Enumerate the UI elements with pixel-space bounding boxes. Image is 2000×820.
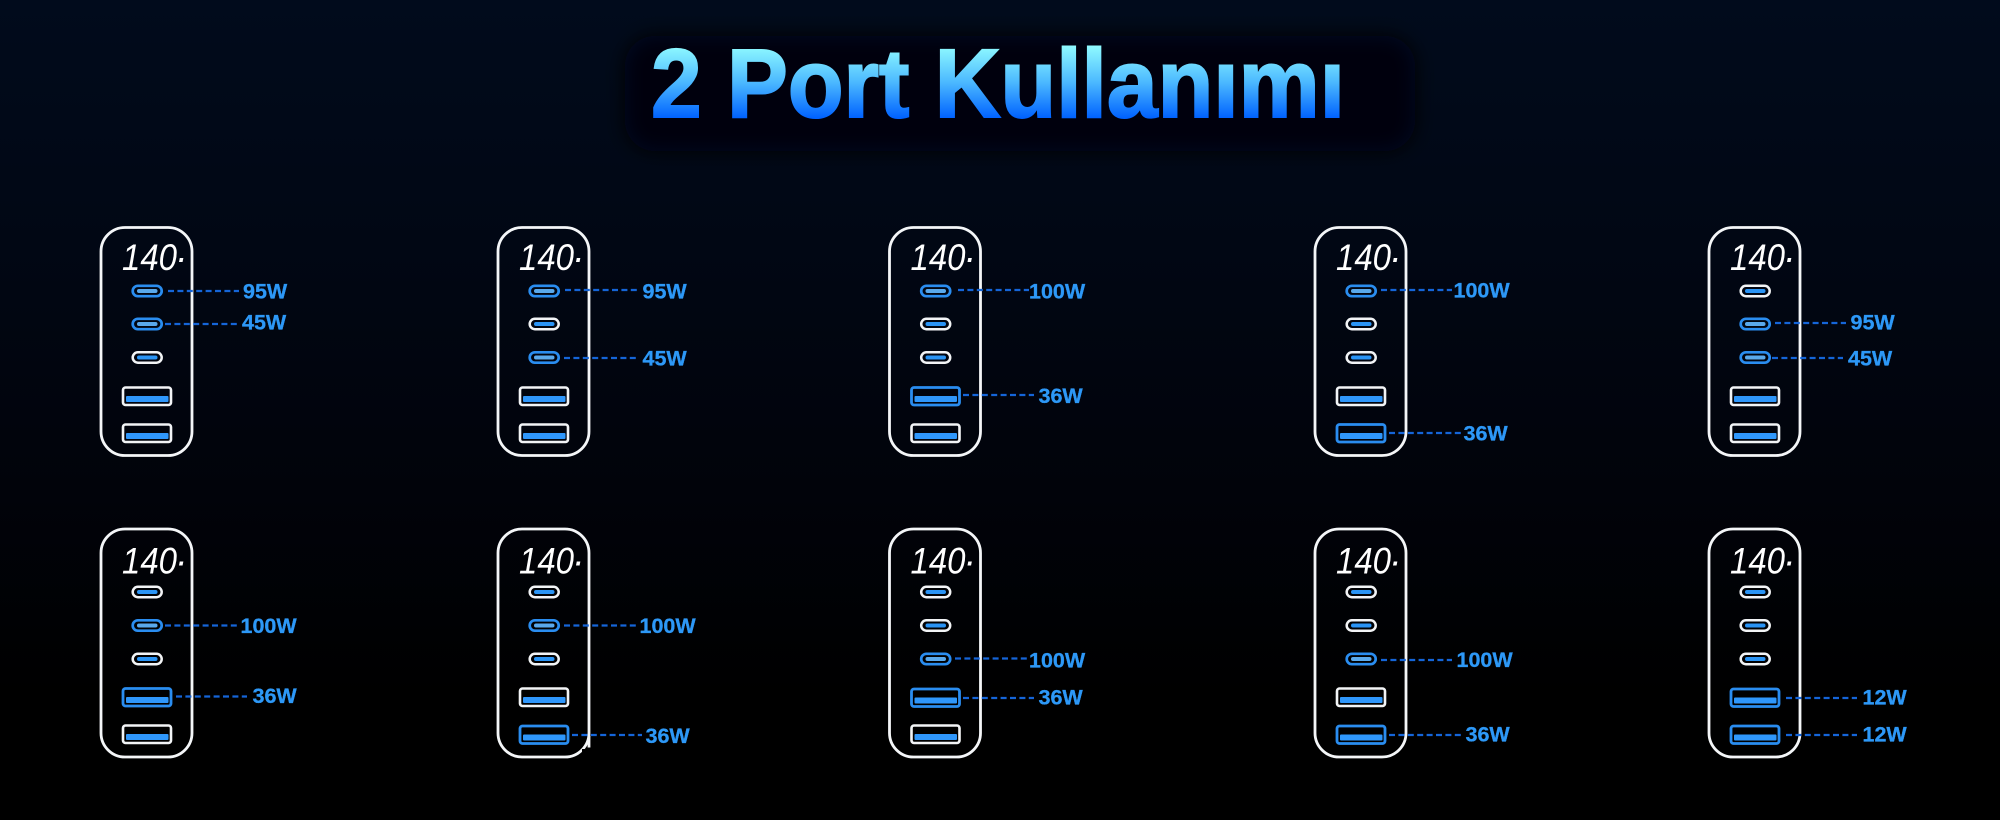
callout: 36W: 36W — [1466, 722, 1510, 746]
port: USB-A 1 — [520, 388, 568, 405]
callout: 36W — [1389, 422, 1508, 446]
port: USB-C 1 — [530, 587, 559, 597]
callout: 100W: 100W — [1454, 278, 1510, 302]
display: · — [964, 237, 976, 278]
callout: 95W: 95W — [1850, 310, 1895, 334]
port: USB-C 3 active — [1741, 352, 1770, 363]
callout: 100W — [165, 614, 297, 638]
callout: 36W — [572, 724, 690, 748]
port: USB-A 1 active — [912, 689, 960, 706]
callout: 36W: 36W — [1464, 422, 1508, 446]
panel: row 1 column 3 — [890, 228, 1086, 456]
display: 140 — [1336, 540, 1391, 582]
port: USB-C 2 — [921, 620, 950, 631]
port: USB-A 2 active — [1731, 726, 1779, 744]
callout: 45W: 45W — [1848, 346, 1893, 370]
display: · — [175, 237, 187, 278]
port: USB-C 1 active — [921, 286, 950, 296]
port: USB-C 2 — [921, 319, 950, 329]
callout: 100W: 100W — [1029, 648, 1086, 672]
panel: row 2 column 2 — [498, 529, 696, 757]
callout: 95W — [168, 280, 288, 304]
title: 2 Port Kullanımı — [651, 29, 1345, 138]
callout: 100W: 100W — [1029, 280, 1086, 304]
callout: 95W — [565, 280, 687, 304]
port: USB-A 1 — [1337, 388, 1385, 405]
charger outline — [890, 529, 980, 757]
port: USB-C 1 — [1741, 286, 1770, 296]
port: USB-C 2 — [1347, 620, 1376, 631]
port: USB-C 2 active — [133, 620, 162, 631]
charger outline — [1315, 529, 1406, 757]
port: USB-C 3 active — [1347, 654, 1376, 664]
port: USB-A 2 — [123, 424, 171, 442]
panel: row 1 column 1 — [101, 228, 288, 456]
display: 140 — [122, 237, 177, 278]
port: USB-C 1 active — [1347, 286, 1376, 296]
callout: 36W — [963, 686, 1083, 710]
charger outline — [1709, 228, 1800, 456]
port: USB-A 2 — [123, 726, 171, 743]
port: USB-C 3 — [1741, 654, 1770, 664]
display: 140 — [1730, 237, 1785, 278]
callout: 12W top — [1786, 686, 1907, 710]
charger outline — [498, 529, 589, 757]
port: USB-C 3 — [1347, 352, 1376, 363]
port: USB-C 3 — [133, 352, 162, 363]
callout: 12W bottom — [1786, 722, 1907, 746]
callout: 100W: 100W — [1456, 648, 1513, 672]
port: USB-C 1 active — [133, 286, 162, 296]
port: USB-C 3 active — [921, 654, 950, 664]
display: · — [1783, 237, 1795, 278]
port: USB-C 1 — [133, 587, 162, 597]
port: USB-C 2 — [1741, 620, 1770, 631]
display: 140 — [122, 540, 177, 582]
panel: row 2 column 5 — [1709, 529, 1907, 757]
port: USB-A 2 — [912, 726, 960, 743]
display: 140 — [519, 237, 574, 278]
display: 140 — [1336, 237, 1391, 278]
callout: 36W: 36W — [646, 724, 690, 748]
port: USB-A 1 active — [1731, 689, 1779, 706]
display: · — [964, 540, 976, 582]
panel: row 2 column 3 — [890, 529, 1086, 757]
port: USB-A 2 active — [520, 726, 568, 744]
port: USB-A 2 active — [1337, 424, 1385, 442]
charger outline — [890, 228, 980, 456]
callout: 12W bottom: 12W — [1862, 722, 1907, 746]
port: USB-C 1 — [1347, 587, 1376, 597]
charger outline — [1709, 529, 1800, 757]
display: 140 — [910, 540, 966, 582]
panel: row 1 column 2 — [498, 228, 687, 456]
callout: 100W — [955, 648, 1086, 672]
port: USB-C 1 active — [530, 286, 559, 296]
port: USB-A 2 — [912, 424, 960, 442]
display: 140 — [1730, 540, 1785, 582]
panel: row 2 column 1 — [101, 529, 297, 757]
display: · — [572, 540, 584, 582]
callout: 100W — [1381, 648, 1513, 672]
port: USB-C 2 — [530, 319, 559, 329]
callout: 36W: 36W — [252, 684, 297, 708]
callout: 100W: 100W — [240, 614, 297, 638]
port: USB-C 2 active — [530, 620, 559, 631]
port: USB-A 1 — [1337, 688, 1385, 706]
display: · — [175, 540, 187, 582]
callout: 100W: 100W — [640, 614, 696, 638]
port: USB-C 2 active — [1741, 319, 1770, 329]
display: · — [572, 237, 584, 278]
charger outline — [101, 228, 192, 456]
port: USB-C 2 active — [133, 319, 162, 329]
callout: 100W — [564, 614, 696, 638]
callout: 12W top: 12W — [1862, 686, 1907, 710]
callout: 45W: 45W — [642, 346, 687, 370]
port: USB-C 2 — [1347, 319, 1376, 329]
port: USB-A 2 — [520, 424, 568, 442]
display: · — [1389, 237, 1401, 278]
callout: 95W: 95W — [243, 280, 288, 304]
port: USB-A 1 — [123, 388, 171, 405]
port: USB-A 1 — [520, 688, 568, 706]
port: USB-A 1 active — [912, 388, 960, 405]
callout: 45W — [564, 346, 687, 370]
charger outline — [1315, 228, 1406, 456]
panel: row 2 column 4 — [1315, 529, 1513, 757]
panel: row 1 column 4 — [1315, 228, 1510, 456]
callout: 36W — [1389, 722, 1510, 746]
port: USB-A 1 active — [123, 688, 171, 706]
display: · — [1389, 540, 1401, 582]
port: USB-A 2 — [1731, 424, 1779, 442]
callout: 100W — [1381, 278, 1510, 302]
port: USB-A 1 — [1731, 388, 1779, 405]
display: 140 — [910, 237, 966, 278]
port: USB-C 3 — [133, 654, 162, 664]
callout: 95W — [1775, 310, 1895, 334]
charger outline — [498, 228, 589, 456]
callout: 36W — [963, 384, 1083, 408]
callout: 95W: 95W — [642, 280, 687, 304]
callout: 36W — [176, 684, 297, 708]
charger outline — [101, 529, 192, 757]
panel: row 1 column 5 — [1709, 228, 1895, 456]
port: USB-C 1 — [1741, 587, 1770, 597]
callout: 45W — [165, 310, 287, 334]
port: USB-C 3 active — [530, 352, 559, 363]
callout: 45W — [1772, 346, 1893, 370]
port: USB-C 1 — [921, 587, 950, 597]
callout: 36W: 36W — [1038, 686, 1083, 710]
callout: 100W — [958, 280, 1086, 304]
port: USB-C 3 — [530, 654, 559, 664]
callout: 36W: 36W — [1038, 384, 1083, 408]
display: · — [1783, 540, 1795, 582]
port: USB-A 2 active — [1337, 726, 1385, 744]
port: USB-C 3 — [921, 352, 950, 363]
callout: 45W: 45W — [242, 310, 287, 334]
display: 140 — [519, 540, 574, 582]
